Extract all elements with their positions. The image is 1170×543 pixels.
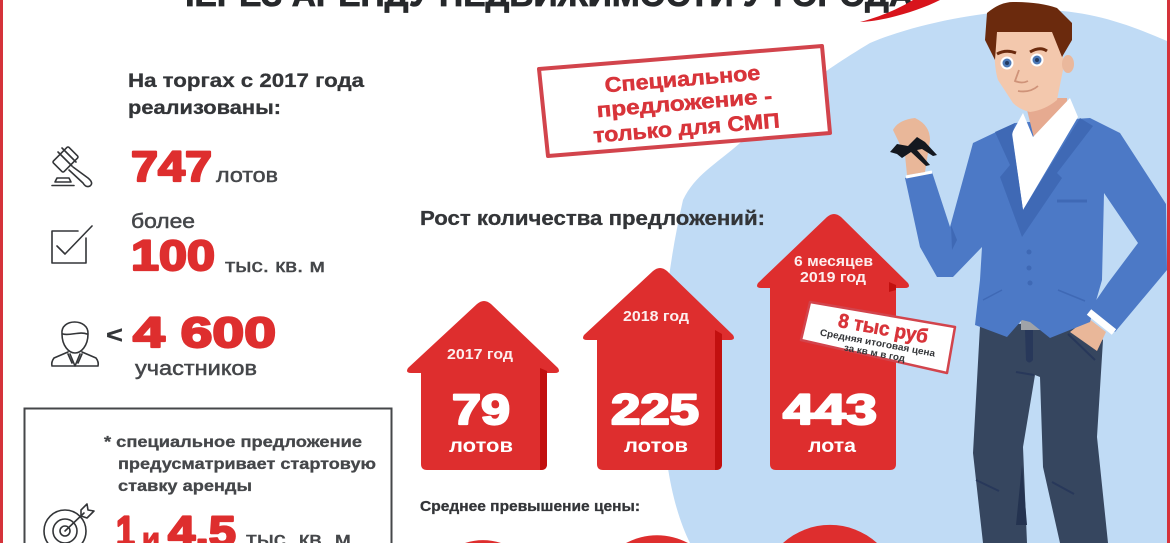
- stat: 747 lots: лотов: [216, 165, 278, 187]
- trousers: [973, 320, 1108, 543]
- house: 2018: лотов: [624, 436, 688, 457]
- stamp: special offer: Специальное: [604, 62, 761, 97]
- house: 6 months 2019: [757, 214, 909, 470]
- man illustration: [890, 2, 1167, 543]
- shirt cuffs: [1089, 312, 1114, 332]
- hair: [985, 2, 1072, 60]
- house: 6 months 2019: 2019 год: [800, 270, 866, 286]
- icon: target: [44, 504, 94, 543]
- stamp: 8 thousand rubles: 8 тыс руб: [836, 310, 930, 348]
- stat: 747 lots: 747: [131, 143, 212, 191]
- stat: over 4600 participants: <: [106, 322, 123, 349]
- lapels: [995, 118, 1093, 237]
- intro heading: реализованы:: [128, 98, 281, 119]
- stamp: 8 thousand rubles: Средняя итоговая цена: [819, 327, 937, 360]
- house: 2017: лотов: [449, 436, 513, 457]
- stamp: special offer: [539, 46, 830, 156]
- icon: checkbox: [52, 226, 92, 263]
- stat: over 4600 participants: 4 600: [133, 309, 276, 357]
- stat: more than 100 thousand sq m: тыс. кв. м: [225, 256, 325, 276]
- house: 2018: 225: [611, 386, 699, 434]
- note text: ставку аренды: [118, 478, 252, 495]
- stat: over 4600 participants: участников: [135, 358, 257, 380]
- intro heading: [128, 71, 365, 119]
- stamp: special offer: только для СМП: [592, 109, 781, 148]
- house: 2017: 79: [452, 386, 510, 434]
- note text: [104, 434, 376, 495]
- icon: person: [52, 322, 98, 366]
- neck and shirt: [1024, 98, 1067, 138]
- house: 6 months 2019: 6 месяцев: [794, 254, 873, 270]
- side border left: [0, 0, 3, 543]
- head: [994, 25, 1063, 112]
- house: 6 months 2019: 443: [783, 386, 877, 434]
- stat: 747 lots: [131, 143, 278, 191]
- jacket: [905, 118, 1167, 338]
- blue background shape: [662, 10, 1167, 543]
- belt: [1021, 316, 1042, 330]
- keys: [890, 137, 937, 166]
- note text: * специальное предложение: [104, 434, 362, 451]
- growth heading: Рост количества предложений:: [420, 208, 765, 230]
- stat: more than 100 thousand sq m: [131, 211, 325, 280]
- stat: more than 100 thousand sq m: 100: [131, 232, 215, 280]
- intro heading: На торгах с 2017 года: [128, 71, 365, 92]
- house: 2018: 2018 год: [623, 309, 689, 325]
- avg price heading: Среднее превышение цены:: [420, 499, 640, 515]
- brows: [997, 49, 1047, 54]
- house: 2017: [407, 301, 559, 470]
- stamp: 8 thousand rubles: за кв м в год: [843, 342, 906, 365]
- house: 6 months 2019: лота: [808, 436, 856, 457]
- stat: over 4600 participants: [106, 309, 276, 380]
- house: 2018: [583, 268, 734, 470]
- pocket hand: [1070, 318, 1106, 351]
- stat: more than 100 thousand sq m: более: [131, 211, 195, 233]
- stamp: special offer: предложение -: [596, 85, 773, 122]
- price circles: [465, 525, 877, 543]
- rate values: [116, 508, 351, 543]
- stamp: 8 thousand rubles: [801, 302, 955, 373]
- red swoosh: [860, 0, 940, 22]
- nose and mouth: [1015, 70, 1038, 91]
- eyes: [1000, 56, 1014, 70]
- house: 2017: 2017 год: [447, 347, 513, 363]
- note text: предусматривает стартовую: [118, 456, 376, 473]
- panel: special offer note: [24, 408, 392, 543]
- side border right: [1167, 0, 1170, 543]
- icon: gavel: [52, 146, 92, 187]
- hand: [893, 118, 930, 175]
